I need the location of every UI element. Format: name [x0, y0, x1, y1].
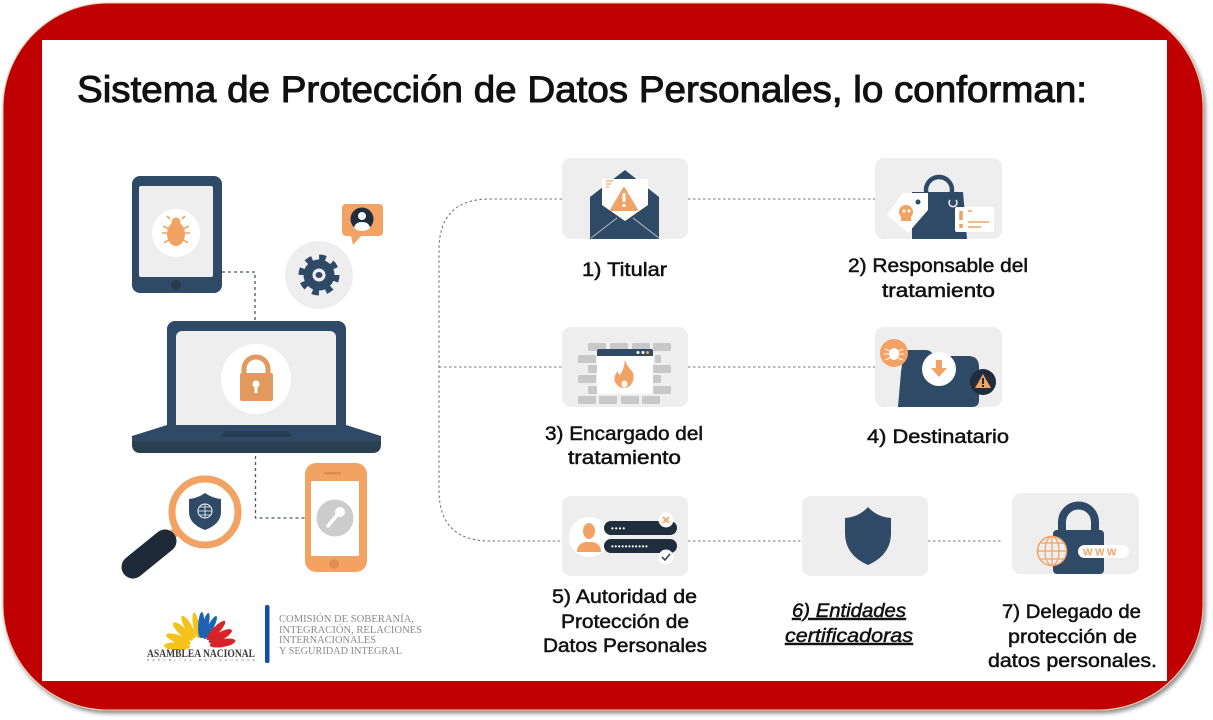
- label: 3) Encargado del tratamiento: tratamiento: [568, 447, 681, 469]
- label: 6) Entidades certificadoras: [785, 600, 913, 647]
- logo: divider: [265, 605, 270, 663]
- label: 3) Encargado del tratamiento: [545, 423, 703, 469]
- label: 1) Titular: 1) Titular: [582, 259, 668, 281]
- logo: commission text: INTEGRACIÓN, RELACIONES: [279, 624, 422, 636]
- icon: envelope with warning: [590, 170, 659, 239]
- icon: shield: [845, 507, 891, 565]
- label: 2) Responsable del tratamiento: 2) Responsable del: [848, 255, 1028, 277]
- label: 5) Autoridad de Protección de Datos Personales: 5) Autoridad de: [552, 586, 697, 608]
- card 5: Autoridad de Protección de Datos Personales: [562, 496, 688, 576]
- icon: shopping bag with tag: [887, 177, 994, 239]
- card background: [875, 158, 1002, 239]
- label: 2) Responsable del tratamiento: [848, 255, 1028, 302]
- card 7: Delegado de protección de datos personales: [1012, 493, 1139, 574]
- icon: folder with download: [880, 339, 996, 407]
- label: 5) Autoridad de Protección de Datos Personales: [543, 586, 707, 657]
- connector: dotted bracket and rows: [439, 199, 1002, 541]
- logo: Asamblea Nacional: [147, 605, 422, 663]
- logo: subtitle: REPÚBLICA DEL ECUADOR: [147, 657, 256, 662]
- logo: commission text: [279, 613, 422, 657]
- card background: [875, 327, 1002, 407]
- label: 5) Autoridad de Protección de Datos Personales: Datos Personales: [543, 635, 707, 657]
- title: Sistema de Protección de Datos Personales, lo conforman:: [77, 69, 1087, 110]
- logo: commission text: Y SEGURIDAD INTEGRAL: [279, 646, 402, 657]
- logo: commission text: INTERNACIONALES: [279, 635, 376, 646]
- card background: [802, 496, 928, 576]
- icon: speech bubble with user: [342, 204, 383, 245]
- icon: tablet with bug: [132, 176, 222, 293]
- label: 2) Responsable del tratamiento: tratamiento: [882, 280, 995, 302]
- card 3: Encargado del tratamiento: [562, 327, 688, 407]
- logo: commission text: COMISIÓN DE SOBERANÍA,: [279, 613, 414, 625]
- card background: [562, 496, 688, 576]
- icon: login with user: •••••••••••: [611, 542, 648, 551]
- label: 4) Destinatario: 4) Destinatario: [867, 426, 1009, 448]
- label: 5) Autoridad de Protección de Datos Personales: Protección de: [561, 611, 689, 633]
- card 6: Entidades certificadoras: [802, 496, 928, 576]
- logo: feathers: [164, 612, 236, 651]
- label: 7) Delegado de protección de datos personales.: protección de: [1008, 626, 1137, 648]
- label: 7) Delegado de protección de datos personales.: datos personales.: [988, 650, 1157, 672]
- card 2: Responsable del tratamiento: [875, 158, 1002, 239]
- label: 3) Encargado del tratamiento: 3) Encargado del: [545, 423, 703, 445]
- icon: padlock with globe: WWW: [1083, 548, 1119, 558]
- connector: left device dotted lines: [222, 272, 305, 518]
- card 1: Titular: [562, 158, 688, 239]
- card background: [1012, 493, 1139, 574]
- label: 6) Entidades certificadoras: certificadoras: [785, 625, 913, 647]
- card background: [562, 158, 688, 239]
- label: 7) Delegado de protección de datos personales.: 7) Delegado de: [1002, 601, 1141, 623]
- label: 6) Entidades certificadoras: 6) Entidades: [792, 600, 906, 622]
- card 4: Destinatario: [875, 327, 1002, 407]
- card background: [562, 327, 688, 407]
- icon: phone with key: [305, 463, 367, 572]
- icon: gear in circle: [285, 241, 353, 309]
- icon: magnifier with shield: [133, 479, 238, 567]
- label: 7) Delegado de protección de datos personales.: [988, 601, 1157, 672]
- icon: firewall: [578, 343, 671, 404]
- icon: login with user: ••••: [611, 524, 626, 533]
- icon: laptop with padlock: [132, 321, 381, 453]
- logo: name: ASAMBLEA NACIONAL: [147, 648, 255, 660]
- icon: login with user: [569, 512, 677, 564]
